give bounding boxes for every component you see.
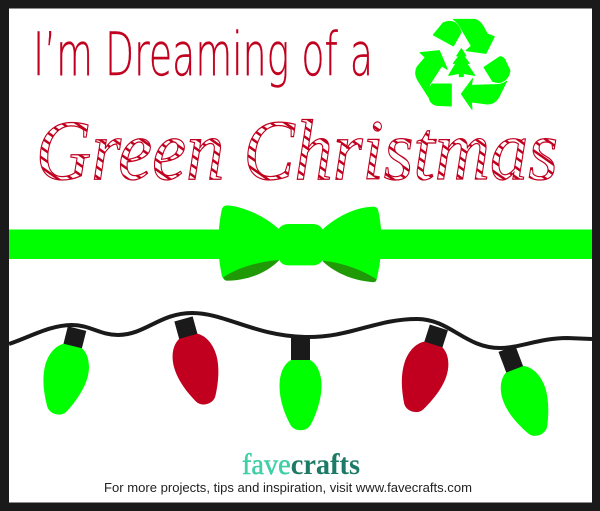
icon: recycling symbol with tree: [416, 19, 510, 109]
bow right loop: [322, 207, 381, 282]
bulb 1 green: [34, 323, 98, 419]
title line: I'm Dreaming of a: I’m Dreaming of a: [33, 20, 373, 90]
bow left loop: [218, 205, 280, 281]
bulb 2 red: [162, 313, 228, 410]
ribbon band: [9, 230, 592, 259]
bow right shadow: [322, 261, 377, 282]
bow left shadow: [223, 260, 279, 281]
logo: favecrafts: favecrafts: [242, 448, 360, 481]
footer tagline: For more projects, tips and inspiration, visit www.favecrafts.com: [104, 481, 472, 495]
bulb 5 green: [486, 341, 560, 443]
bow: [218, 205, 381, 282]
bulb 4 red: [391, 321, 460, 418]
light string wire: [9, 313, 592, 348]
bulb 3 green: [280, 337, 322, 430]
bow knot: [278, 224, 323, 265]
